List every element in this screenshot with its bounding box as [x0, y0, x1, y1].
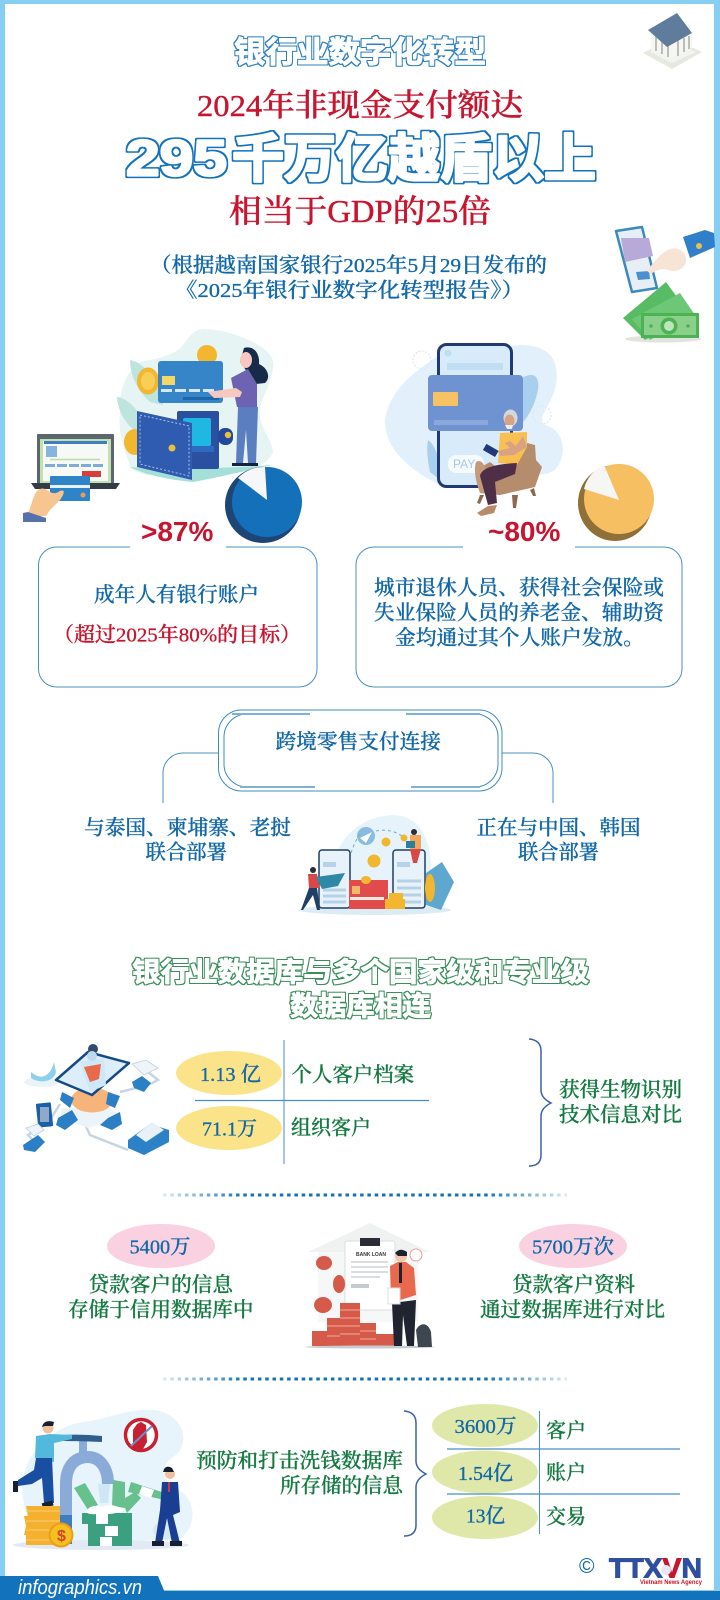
source note [150, 253, 547, 302]
heading: banking database links: 数据库相连 [290, 992, 431, 1022]
text: borrower profiles compared: 贷款客户资料 [512, 1274, 635, 1296]
panel: credit database [68, 1223, 665, 1348]
text: Thailand, Cambodia, Laos: 与泰国、柬埔寨、老挝 [84, 816, 291, 840]
illustration: money laundering faucet [13, 1410, 193, 1550]
badge: 1.3 billion: 13亿 [466, 1504, 505, 1528]
icon: banknotes [623, 282, 701, 342]
illustration: phones, card and coins [299, 815, 454, 915]
source note: 《2025年银行业数字化转型报告》） [175, 278, 524, 302]
stat: about 80 percent: ~80% [488, 516, 560, 547]
badge: 54 million: 5400万 [130, 1236, 190, 1258]
badge: 36 million [432, 1404, 538, 1447]
badge: 1.3 billion [432, 1496, 538, 1539]
card: adults with accounts text: 成年人有银行账户 [94, 582, 259, 606]
card: pension text: 金均通过其个人账户发放。 [395, 626, 644, 650]
connector: right branch [498, 753, 553, 803]
badge: 113 million: 1.13 亿 [200, 1063, 261, 1086]
chart: 87 percent pie [225, 467, 302, 543]
illustration: bank loan document and man [305, 1223, 435, 1348]
text: biometric comparison [559, 1078, 682, 1126]
label: accounts: 账户 [546, 1462, 586, 1484]
label: transactions: 交易 [546, 1506, 586, 1528]
illustration: laptop and hand with card [23, 434, 120, 522]
logo: TTXVN Vietnam News Agency: © [579, 1555, 595, 1578]
chart: 80 percent pie [578, 464, 654, 541]
card: pension text [356, 547, 682, 687]
heading: banking database links [132, 958, 589, 1022]
connector: left branch [163, 753, 218, 803]
headline: cashless payments in 2024: 2024年非现金支付额达 [197, 88, 524, 123]
icon: bank building [643, 13, 702, 69]
headline: 295 trillion VND figure: 295 [126, 130, 227, 186]
card: adults with accounts text: （超过2025年80%的目标） [53, 622, 301, 646]
badge: 711 thousand [176, 1106, 282, 1150]
badge: 57 million times [519, 1224, 627, 1268]
brace [404, 1411, 426, 1536]
text: AML database information: 所存储的信息 [280, 1474, 403, 1498]
table lines [447, 1411, 680, 1534]
logo: TTXVN Vietnam News Agency: TTXVN [609, 1552, 702, 1584]
text: biometric comparison: 技术信息对比 [559, 1104, 682, 1126]
illustration: bank loan document and man: BANK LOAN [356, 1252, 386, 1258]
text: China, Korea: 正在与中国、韩国 [476, 816, 640, 840]
card: pension text: 城市退休人员、获得社会保险或 [374, 576, 664, 600]
badge: 54 million [107, 1224, 215, 1268]
table lines [195, 1040, 429, 1164]
logo: TTXVN Vietnam News Agency: Vietnam News Agency [640, 1579, 702, 1586]
text: borrower information stored: 贷款客户的信息 [88, 1274, 234, 1296]
label: individual customer profiles: 个人客户档案 [292, 1064, 414, 1086]
panel: adults with bank accounts [23, 329, 317, 687]
illustration: elderly man with phone and card [385, 344, 563, 516]
footer bar: infographics.vn [0, 1576, 720, 1600]
text: borrower profiles compared [480, 1274, 665, 1322]
card: pension text: 失业保险人员的养老金、辅助资 [374, 602, 666, 624]
stat: over 87 percent: >87% [141, 516, 213, 547]
illustration: money laundering faucet: $ [57, 1528, 66, 1545]
text: AML database information: 预防和打击洗钱数据库 [196, 1450, 403, 1472]
brace [529, 1039, 551, 1166]
headline: 25 times GDP: 相当于GDP的25倍 [229, 193, 491, 229]
label: customers: 客户 [546, 1420, 586, 1442]
footer bar: infographics.vn: infographics.vn [18, 1577, 142, 1599]
illustration: elderly man with phone and card: PAY [453, 457, 475, 471]
text: China, Korea: 联合部署 [518, 841, 599, 864]
illustration: isometric identity network [23, 1044, 169, 1155]
badge: 711 thousand: 71.1万 [202, 1118, 257, 1140]
card: adults with accounts text [38, 547, 317, 687]
badge: 57 million times: 5700万次 [532, 1236, 614, 1258]
badge: 113 million [176, 1051, 282, 1095]
headline: 295 trillion VND figure: 千万亿越盾以上 [232, 131, 596, 189]
heading box: cross-border payment: 跨境零售支付连接 [276, 730, 442, 754]
heading box: cross-border payment [218, 710, 502, 791]
heading: banking database links: 银行业数据库与多个国家级和专业级 [132, 958, 589, 988]
title: banking digital transformation: 银行业数字化转型 [234, 36, 486, 70]
panel: pensions paid through personal accounts [356, 344, 682, 687]
text: Thailand, Cambodia, Laos [84, 816, 291, 864]
text: Thailand, Cambodia, Laos: 联合部署 [146, 841, 227, 864]
text: biometric comparison: 获得生物识别 [559, 1078, 682, 1102]
source note: （根据越南国家银行2025年5月29日发布的 [150, 253, 547, 277]
badge: 154 million: 1.54亿 [458, 1462, 513, 1485]
illustration: woman with wallet and card [117, 329, 273, 482]
label: organisational customers: 组织客户 [291, 1116, 371, 1140]
panel: anti-money-laundering database [13, 1404, 680, 1550]
icon: phone with pointing hand [616, 227, 715, 292]
text: China, Korea [476, 816, 640, 864]
logo: TTXVN Vietnam News Agency [579, 1552, 702, 1586]
text: borrower information stored [68, 1274, 254, 1322]
text: borrower information stored: 存储于信用数据库中 [68, 1298, 254, 1322]
badge: 154 million [432, 1450, 538, 1494]
badge: 36 million: 3600万 [454, 1416, 516, 1438]
panel: cross-border retail payment links [84, 710, 640, 915]
text: borrower profiles compared: 通过数据库进行对比 [480, 1298, 665, 1322]
text: AML database information [196, 1450, 403, 1498]
panel: biometric comparison [23, 1039, 682, 1166]
